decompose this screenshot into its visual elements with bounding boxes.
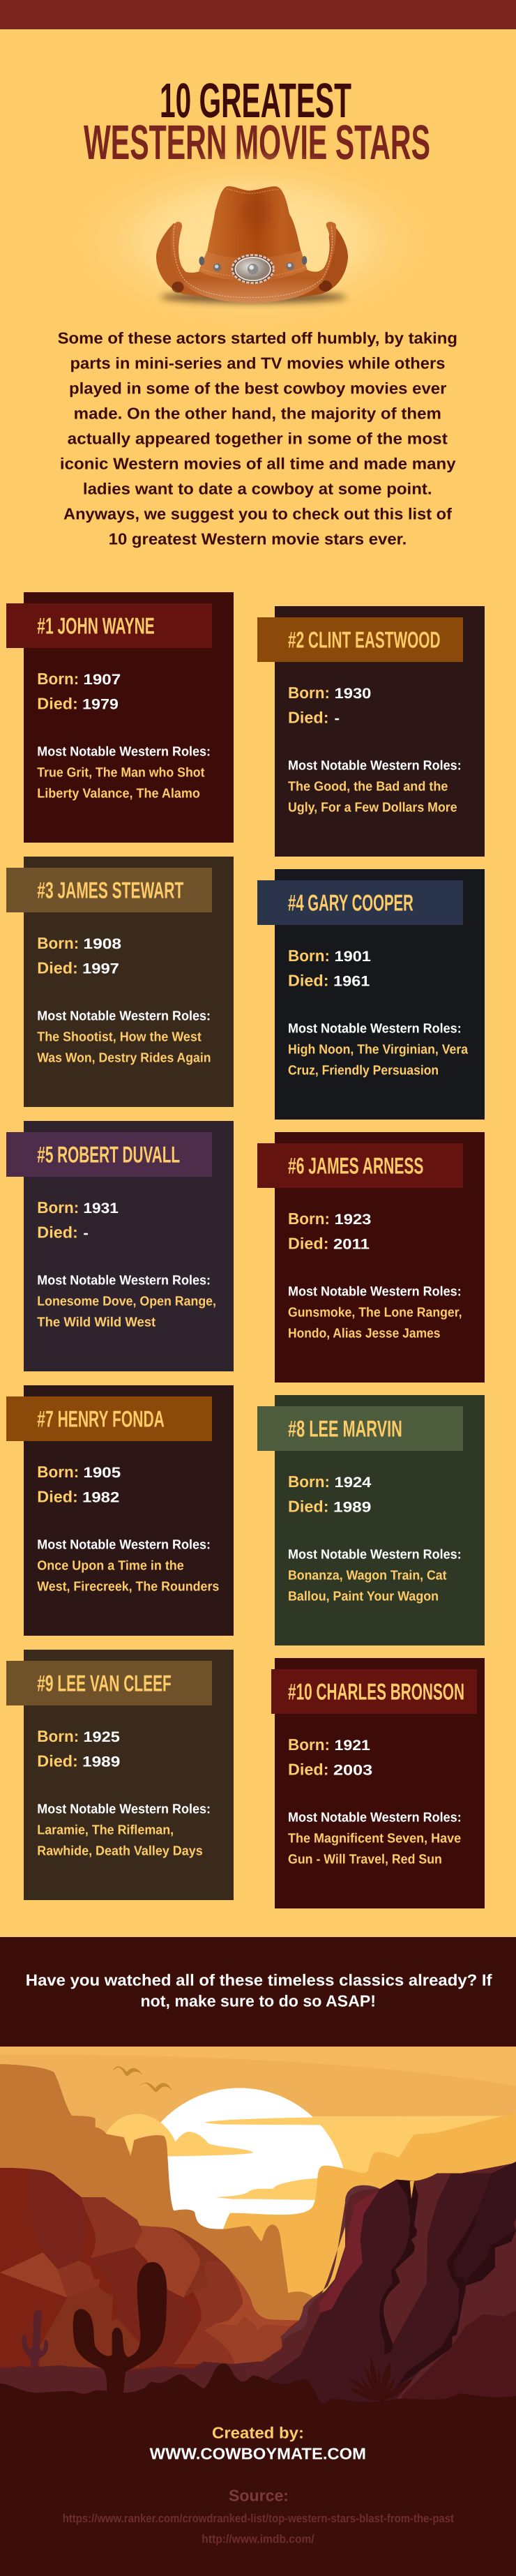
- panel: #3 James Stewart: [6, 857, 234, 1107]
- panel: #5 Robert Duvall: 1931: [83, 1200, 119, 1217]
- yucca plant: [349, 2357, 413, 2401]
- panel: #7 Henry Fonda: 1982: [82, 1490, 119, 1506]
- panel: #5 Robert Duvall: Most Notable Western Roles:: [37, 1273, 211, 1288]
- panel: #7 Henry Fonda: #7 HENRY FONDA: [37, 1406, 165, 1431]
- sources: https://www.ranker.com/crowdranked-list/top-western-stars-blast-from-the-past: [63, 2512, 454, 2525]
- panel: #3 James Stewart: Most Notable Western Roles:: [37, 1009, 211, 1023]
- panel: #10 Charles Bronson: 2003: [333, 1763, 372, 1779]
- panel: #9 Lee Van Cleef: Rawhide, Death Valley Days: [37, 1844, 203, 1858]
- panel: #2 Clint Eastwood: The Good, the Bad and the: [288, 779, 448, 794]
- panel: #8 Lee Marvin: [257, 1395, 485, 1645]
- intro text: played in some of the best cowboy movies ever: [69, 379, 446, 398]
- panel: #10 Charles Bronson: [271, 1658, 485, 1908]
- panel: #9 Lee Van Cleef: #9 LEE VAN CLEEF: [37, 1670, 172, 1696]
- panel: #1 John Wayne: Most Notable Western Roles:: [37, 744, 211, 759]
- panel: #2 Clint Eastwood: Most Notable Western Roles:: [288, 758, 462, 773]
- panel: #8 Lee Marvin: 1989: [333, 1500, 371, 1516]
- sources: http://www.imdb.com/: [202, 2533, 314, 2546]
- panel: #1 John Wayne: 1979: [82, 697, 119, 713]
- panel: #5 Robert Duvall: Lonesome Dove, Open Range,: [37, 1294, 216, 1309]
- panel: #8 Lee Marvin: #8 LEE MARVIN: [288, 1415, 402, 1441]
- panel: #10 Charles Bronson: Born:: [288, 1735, 330, 1754]
- intro text: Anyways, we suggest you to check out this list of: [63, 505, 452, 523]
- panel: #9 Lee Van Cleef: 1989: [82, 1754, 120, 1770]
- panel: #2 Clint Eastwood: Born:: [288, 684, 330, 702]
- panel: #7 Henry Fonda: Most Notable Western Roles:: [37, 1537, 211, 1552]
- panel: #1 John Wayne: [6, 592, 234, 843]
- mesa: [0, 2064, 313, 2349]
- panel: #5 Robert Duvall: Died:: [37, 1223, 78, 1242]
- panel: #8 Lee Marvin: Died:: [288, 1498, 329, 1516]
- closing banner: not, make sure to do so ASAP!: [141, 1992, 376, 2010]
- panel: #3 James Stewart: Died:: [37, 959, 78, 977]
- panel: #3 James Stewart: The Shootist, How the West: [37, 1030, 202, 1044]
- far cliff: [223, 2113, 516, 2372]
- sources: [63, 2487, 454, 2546]
- intro text: Some of these actors started off humbly, by taking: [58, 329, 457, 347]
- panel: #7 Henry Fonda: Died:: [37, 1488, 78, 1506]
- panel: #7 Henry Fonda: Born:: [37, 1463, 79, 1481]
- intro text: 10 greatest Western movie stars ever.: [109, 530, 407, 548]
- panel: #2 Clint Eastwood: Died:: [288, 709, 329, 727]
- panel: #8 Lee Marvin: Most Notable Western Roles:: [288, 1547, 462, 1562]
- title: [84, 73, 430, 170]
- ground middle layer: [0, 2362, 270, 2409]
- illustration: desert canyon at sunset: [0, 2047, 516, 2423]
- panel: #9 Lee Van Cleef: [6, 1650, 234, 1900]
- panel: #6 James Arness: 1923: [335, 1212, 371, 1228]
- top bar: [0, 0, 516, 29]
- panel: #4 Gary Cooper: Cruz, Friendly Persuasion: [288, 1063, 439, 1078]
- panel: #3 James Stewart: Was Won, Destry Rides Again: [37, 1050, 211, 1065]
- panel: #10 Charles Bronson: Most Notable Western Roles:: [288, 1810, 462, 1825]
- panel: #4 Gary Cooper: 1901: [335, 949, 371, 965]
- icon: cowboy hat with glow: [64, 150, 441, 331]
- right dark cliffs: [246, 2162, 516, 2409]
- closing banner: [0, 1937, 516, 2047]
- sun: [132, 2088, 347, 2303]
- clouds: [106, 2114, 504, 2200]
- panel: #6 James Arness: Died:: [288, 1235, 329, 1253]
- panel: #9 Lee Van Cleef: 1925: [83, 1729, 120, 1745]
- title: 10 GREATEST: [160, 73, 351, 128]
- panel: #4 Gary Cooper: High Noon, The Virginian, Vera: [288, 1042, 468, 1057]
- panel: #6 James Arness: 2011: [333, 1237, 370, 1253]
- panel: #7 Henry Fonda: [6, 1385, 234, 1636]
- panel: #9 Lee Van Cleef: Laramie, The Rifleman,: [37, 1823, 174, 1837]
- panel: #7 Henry Fonda: West, Firecreek, The Rounders: [37, 1579, 219, 1594]
- panel: #4 Gary Cooper: [257, 869, 485, 1120]
- panel: #6 James Arness: [257, 1132, 485, 1383]
- panel: #4 Gary Cooper: Died:: [288, 972, 329, 990]
- panel: #3 James Stewart: 1997: [82, 961, 119, 977]
- panel: #8 Lee Marvin: Born:: [288, 1472, 330, 1491]
- panel: #1 John Wayne: #1 JOHN WAYNE: [37, 612, 155, 638]
- panel: #3 James Stewart: #3 JAMES STEWART: [37, 877, 183, 903]
- panel: #4 Gary Cooper: #4 GARY COOPER: [288, 889, 413, 915]
- panel: #10 Charles Bronson: The Magnificent Seven, Have: [288, 1831, 461, 1846]
- panel: #7 Henry Fonda: Once Upon a Time in the: [37, 1558, 184, 1573]
- panel: #9 Lee Van Cleef: Born:: [37, 1727, 79, 1745]
- intro text: actually appeared together in some of the most: [68, 430, 448, 448]
- panel: #5 Robert Duvall: Born:: [37, 1198, 79, 1217]
- footer background: [0, 2372, 516, 2576]
- panel: #4 Gary Cooper: 1961: [333, 974, 370, 990]
- intro text: ladies want to date a cowboy at some point.: [83, 480, 432, 498]
- panel: #1 John Wayne: Died:: [37, 695, 78, 713]
- panel: #6 James Arness: Most Notable Western Roles:: [288, 1284, 462, 1299]
- panel: #8 Lee Marvin: Bonanza, Wagon Train, Cat: [288, 1568, 447, 1583]
- panel: #2 Clint Eastwood: -: [335, 711, 340, 727]
- credit: WWW.COWBOYMATE.COM: [150, 2445, 366, 2463]
- panel: #10 Charles Bronson: 1921: [335, 1738, 370, 1754]
- panel: #1 John Wayne: 1907: [83, 672, 121, 688]
- panel: #2 Clint Eastwood: 1930: [335, 686, 371, 702]
- left red rocks: [0, 2168, 298, 2383]
- panel: #9 Lee Van Cleef: Died:: [37, 1752, 78, 1770]
- panel: #10 Charles Bronson: Died:: [288, 1761, 329, 1779]
- panel: #6 James Arness: #6 JAMES ARNESS: [288, 1152, 423, 1178]
- panel: #4 Gary Cooper: Born:: [288, 947, 330, 965]
- sources: Source:: [229, 2487, 289, 2505]
- credit: [150, 2424, 366, 2463]
- small cactus: [22, 2310, 48, 2369]
- intro text: [58, 329, 457, 548]
- panel: #7 Henry Fonda: 1905: [83, 1465, 121, 1481]
- panel: #5 Robert Duvall: [6, 1121, 234, 1371]
- panel: #1 John Wayne: True Grit, The Man who Shot: [37, 765, 205, 780]
- panel: #1 John Wayne: Liberty Valance, The Alamo: [37, 786, 200, 801]
- panel: #5 Robert Duvall: The Wild Wild West: [37, 1315, 156, 1330]
- panel: #2 Clint Eastwood: [257, 606, 485, 857]
- panel: #4 Gary Cooper: Most Notable Western Roles:: [288, 1021, 462, 1036]
- panel: #3 James Stewart: 1908: [83, 936, 121, 952]
- intro text: iconic Western movies of all time and made many: [60, 455, 456, 473]
- intro text: made. On the other hand, the majority of them: [74, 405, 441, 423]
- panel: #8 Lee Marvin: 1924: [335, 1475, 372, 1491]
- ground foreground: [0, 2363, 516, 2423]
- panel: #5 Robert Duvall: -: [83, 1226, 89, 1242]
- panel: #3 James Stewart: Born:: [37, 934, 79, 952]
- credit: Created by:: [212, 2424, 304, 2442]
- panel: #8 Lee Marvin: Ballou, Paint Your Wagon: [288, 1589, 439, 1604]
- panel: #6 James Arness: Hondo, Alias Jesse James: [288, 1326, 441, 1341]
- closing banner: Have you watched all of these timeless classics already? If: [26, 1971, 492, 1989]
- panel: #10 Charles Bronson: Gun - Will Travel, Red Sun: [288, 1852, 442, 1867]
- birds: [113, 2066, 172, 2093]
- panel: #5 Robert Duvall: #5 ROBERT DUVALL: [37, 1141, 180, 1167]
- big cactus: [73, 2262, 167, 2393]
- panel: #6 James Arness: Gunsmoke, The Lone Ranger,: [288, 1305, 462, 1320]
- panel: #6 James Arness: Born:: [288, 1210, 330, 1228]
- intro text: parts in mini-series and TV movies while others: [70, 354, 445, 372]
- panel: #9 Lee Van Cleef: Most Notable Western Roles:: [37, 1802, 211, 1816]
- panel: #1 John Wayne: Born:: [37, 670, 79, 688]
- panel: #2 Clint Eastwood: Ugly, For a Few Dollars More: [288, 800, 457, 815]
